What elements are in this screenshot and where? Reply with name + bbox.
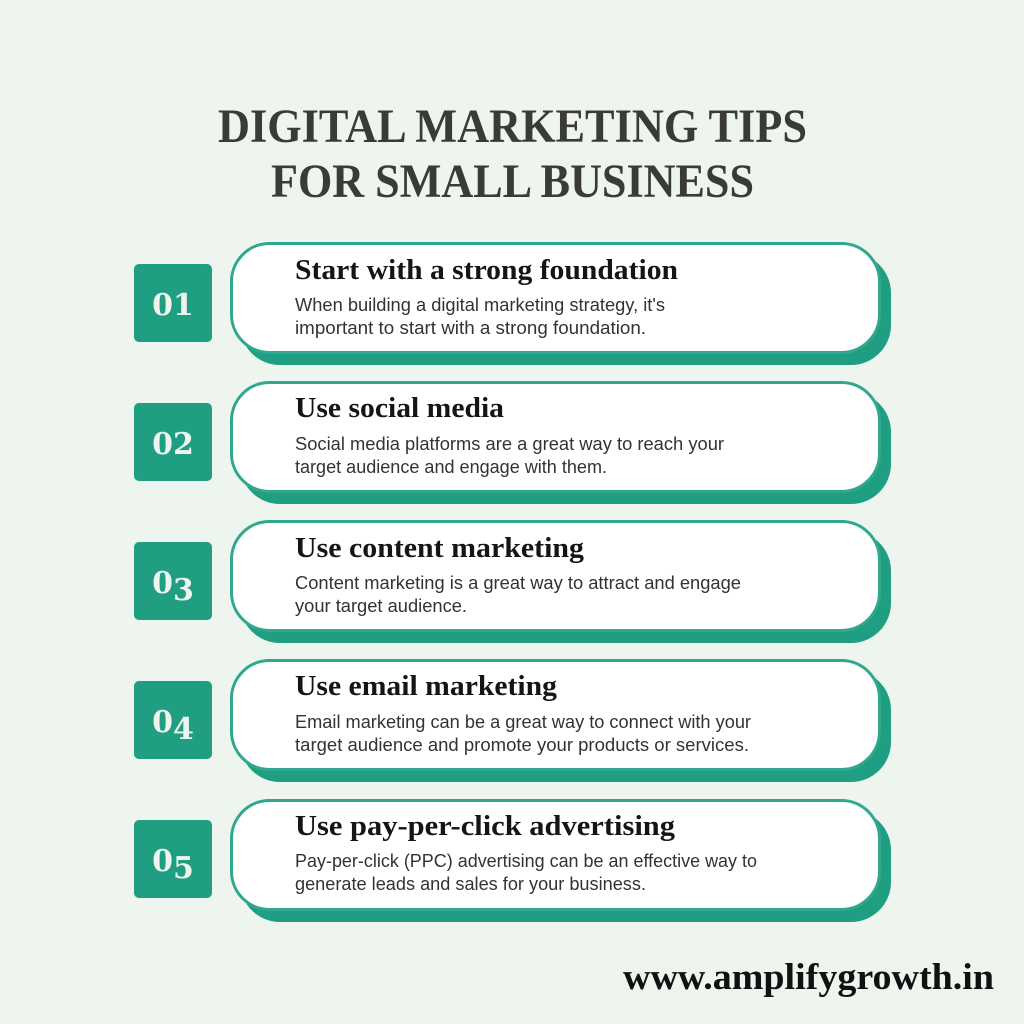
text: tip 01: important to start with a strong foundation. bbox=[295, 318, 646, 338]
text: tip 01 bbox=[295, 295, 665, 338]
badge: 04: 0 bbox=[152, 705, 173, 740]
text: tip 01: When building a digital marketing strategy, it's bbox=[295, 295, 665, 315]
text: tip 04: target audience and promote your products or services. bbox=[295, 735, 749, 755]
footer website: www.amplifygrowth.in bbox=[623, 957, 994, 998]
heading: tip 02: Use social media bbox=[295, 392, 505, 424]
text: tip 05: generate leads and sales for your business. bbox=[295, 874, 646, 894]
badge: 01: 01 bbox=[152, 288, 194, 323]
text: tip 05 bbox=[295, 851, 757, 894]
text: tip 04 bbox=[295, 712, 751, 755]
title: FOR SMALL BUSINESS bbox=[271, 155, 754, 208]
card: tip 04 bbox=[232, 660, 891, 782]
text: tip 02 bbox=[295, 434, 724, 477]
badge: 03 bbox=[134, 542, 212, 620]
panel: tip 02 bbox=[134, 382, 891, 504]
panel: tip 05 bbox=[134, 800, 891, 922]
badge: 02 bbox=[134, 403, 212, 481]
text: tip 03: Content marketing is a great way to attract and engage bbox=[295, 573, 741, 593]
badge: 04: 4 bbox=[173, 712, 194, 747]
title: DIGITAL MARKETING TIPS bbox=[218, 100, 807, 153]
card: tip 01 bbox=[232, 244, 891, 365]
heading: tip 05: Use pay-per-click advertising bbox=[295, 810, 676, 842]
panel: tip 03 bbox=[134, 522, 891, 643]
panel: tip 04 bbox=[134, 660, 891, 782]
badge: 03: 3 bbox=[173, 573, 194, 608]
badge: 05 bbox=[134, 820, 212, 898]
text: tip 02: Social media platforms are a great way to reach your bbox=[295, 434, 724, 454]
badge: 01 bbox=[134, 264, 212, 342]
title bbox=[218, 100, 807, 208]
heading: tip 04: Use email marketing bbox=[295, 670, 558, 702]
badge: 03: 0 bbox=[152, 566, 173, 601]
text: tip 03 bbox=[295, 573, 741, 616]
text: tip 04: Email marketing can be a great way to connect with your bbox=[295, 712, 751, 732]
badge: 05: 0 bbox=[152, 844, 173, 879]
card: tip 02 bbox=[232, 382, 891, 504]
card: tip 05 bbox=[232, 800, 891, 922]
text: tip 03: your target audience. bbox=[295, 596, 467, 616]
text: tip 05: Pay-per-click (PPC) advertising can be an effective way to bbox=[295, 851, 757, 871]
panel: tip 01 bbox=[134, 244, 891, 365]
heading: tip 03: Use content marketing bbox=[295, 532, 585, 564]
badge: 02: 02 bbox=[152, 427, 194, 462]
text: tip 02: target audience and engage with them. bbox=[295, 457, 607, 477]
badge: 05: 5 bbox=[173, 851, 194, 886]
card: tip 03 bbox=[232, 522, 891, 643]
heading: tip 01: Start with a strong foundation bbox=[295, 254, 678, 286]
badge: 04 bbox=[134, 681, 212, 759]
